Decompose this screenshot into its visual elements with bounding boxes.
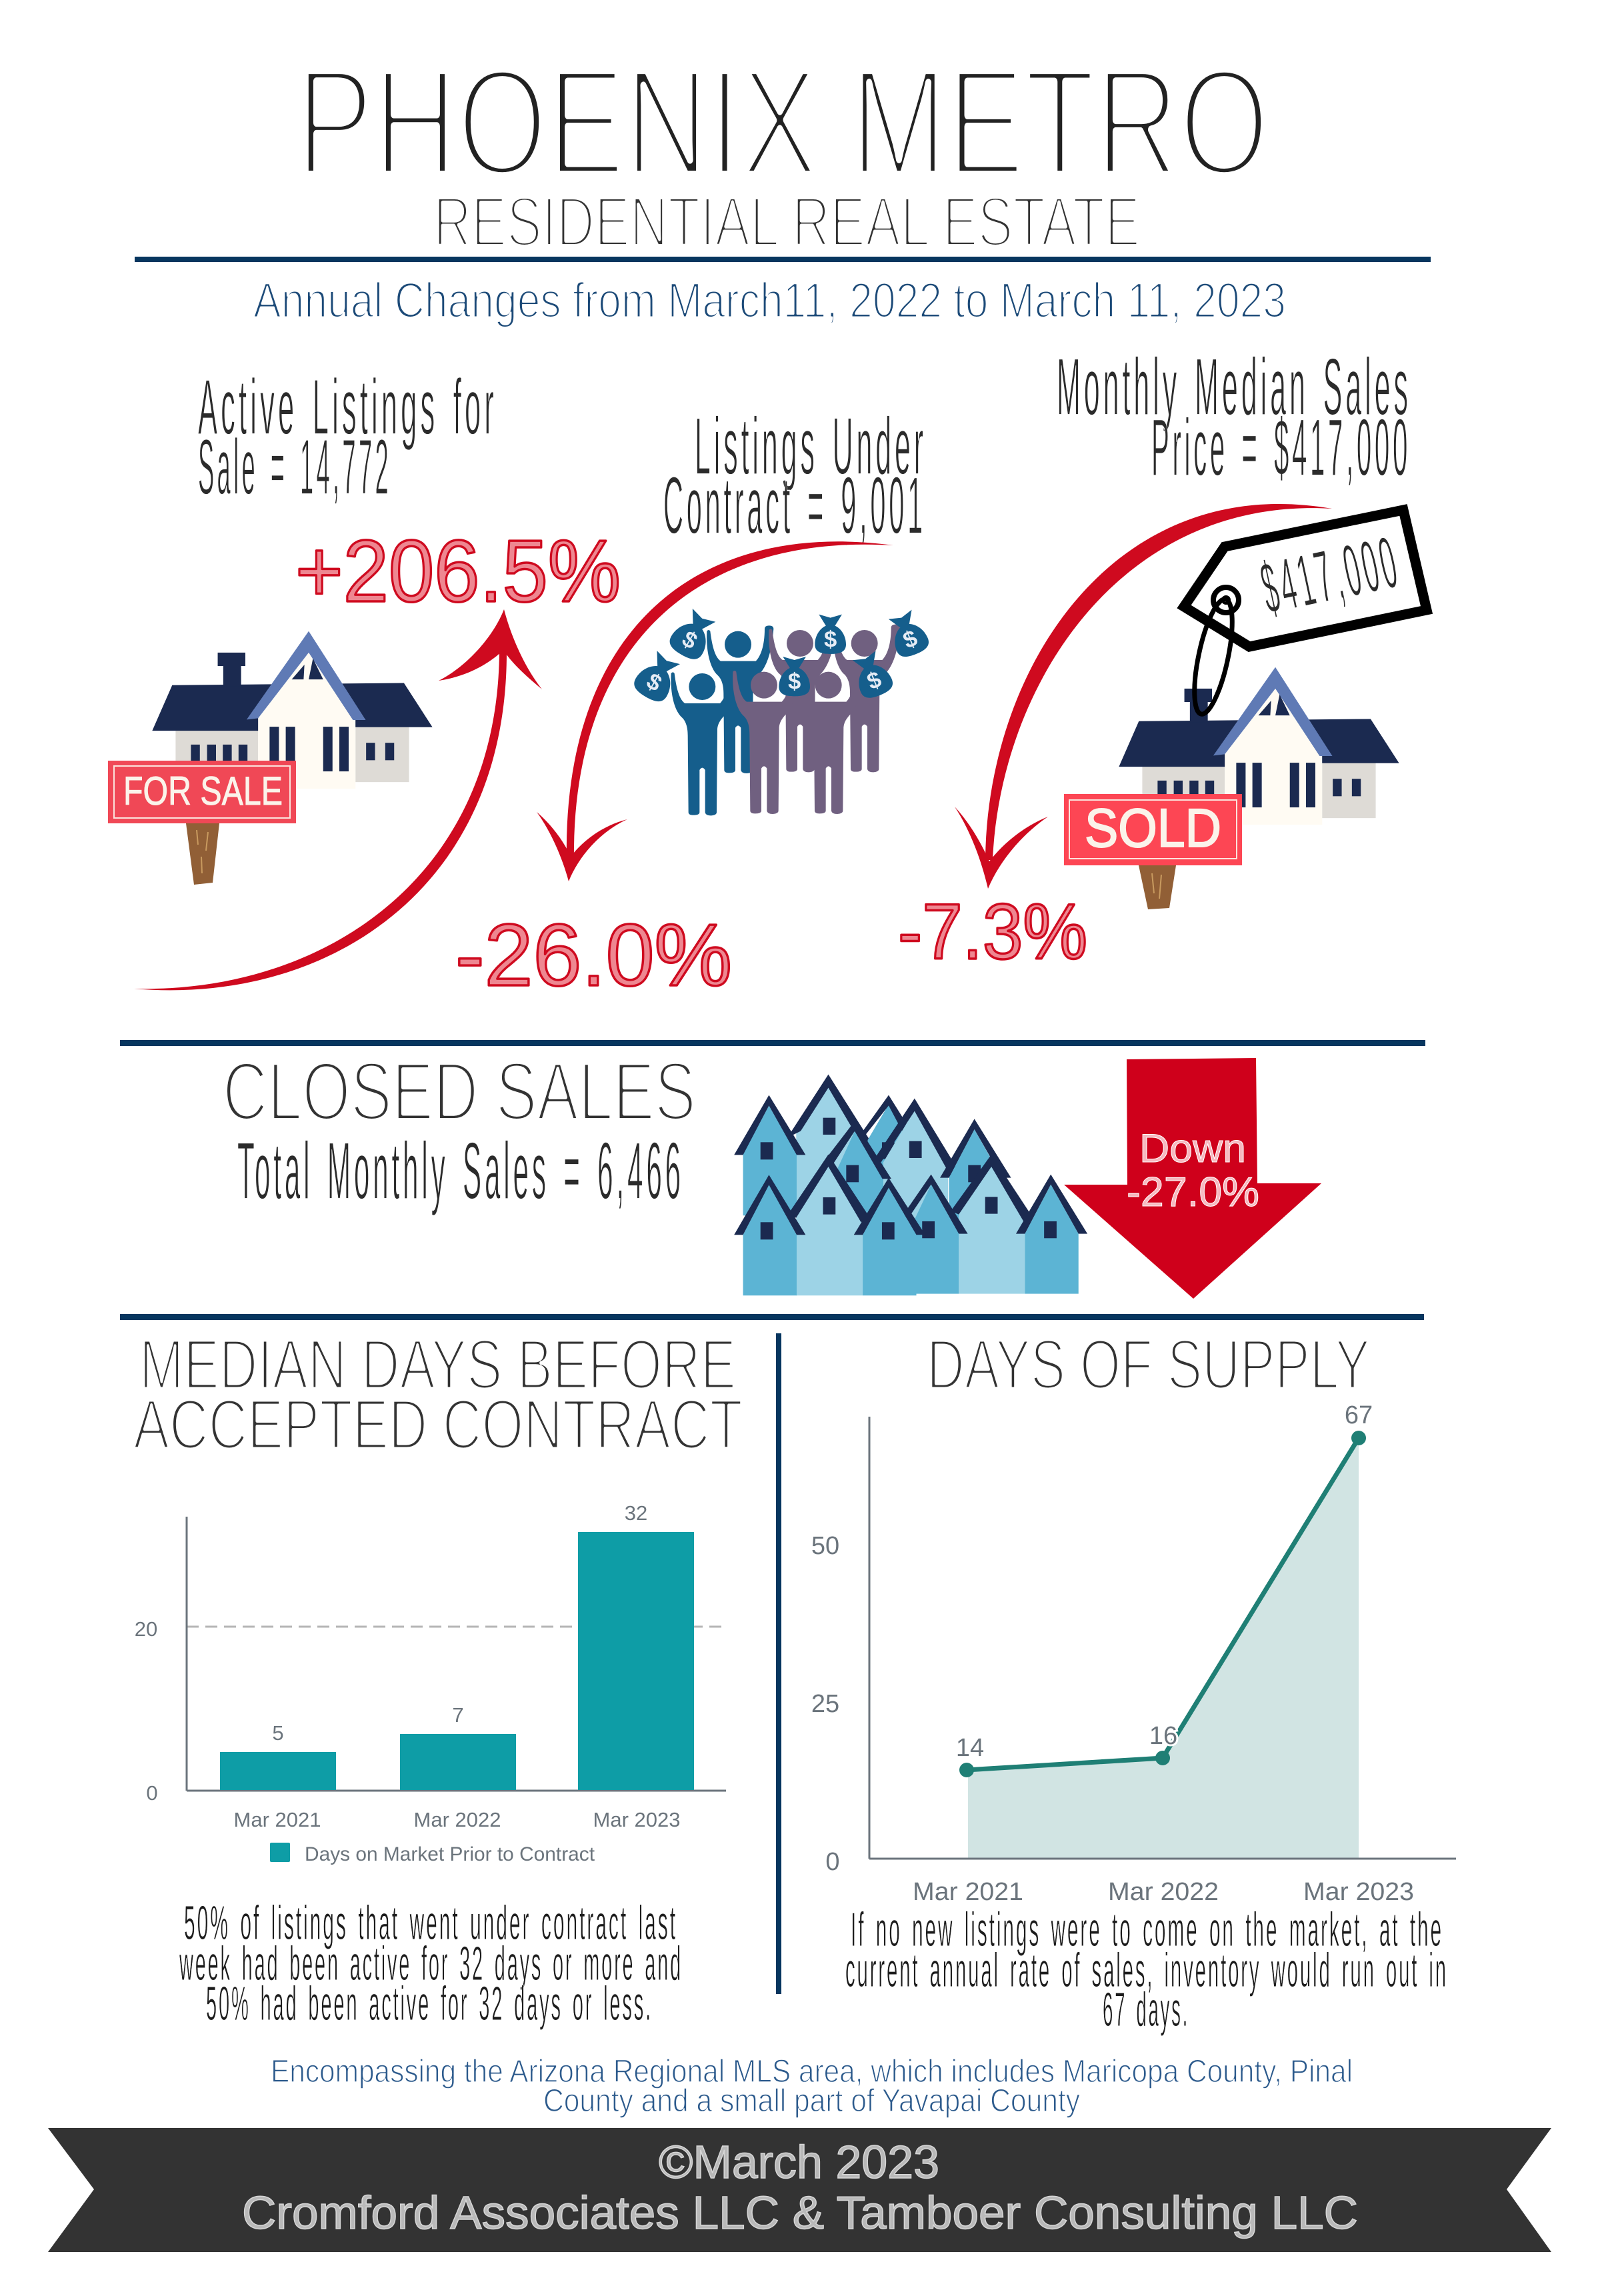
money bags: $: [678, 626, 701, 655]
closed sales heading: CLOSED SALES: [223, 1046, 696, 1138]
area chart: [811, 1401, 1456, 1906]
panel: closed sales: [223, 1046, 1321, 1299]
subtitle: RESIDENTIAL REAL ESTATE: [433, 183, 1140, 261]
area chart: 16: [1149, 1722, 1177, 1750]
bar chart: Mar 2021: [234, 1808, 321, 1831]
money bags: $: [788, 669, 801, 695]
money bags: [630, 606, 932, 706]
title: PHOENIX METRO: [296, 38, 1269, 207]
text: 50% had been active for 32 days or less.: [206, 1977, 653, 2031]
area chart: 50: [811, 1532, 839, 1560]
closed sales change: [1127, 1126, 1259, 1215]
bar chart: 20: [135, 1617, 157, 1641]
icon: for sale sign: FOR SALE: [123, 769, 283, 813]
chart legend: Days on Market Prior to Contract: [305, 1843, 595, 1865]
days of supply note: 67 days.: [1103, 1983, 1189, 2037]
text: Listings Under: [695, 401, 927, 491]
arrow: big down: [1064, 1058, 1321, 1299]
icon: price tag: [1184, 510, 1427, 717]
date range heading: Annual Changes from March11, 2022 to March 11, 2023: [253, 273, 1286, 328]
source note: County and a small part of Yavapai County: [543, 2083, 1080, 2119]
under contract change: -26.0%: [455, 906, 732, 1004]
source note: Encompassing the Arizona Regional MLS area, which includes Maricopa County, Pinal: [271, 2054, 1353, 2089]
money bags: $: [899, 625, 921, 654]
median days heading: [133, 1325, 743, 1464]
panel: active listings: Sale = 14,772: [198, 423, 391, 511]
median days note: [179, 1897, 683, 2031]
text: 50% of listings that went under contract last: [184, 1897, 677, 1950]
icon: sold sign: SOLD: [1085, 798, 1221, 859]
panel: days of supply: [811, 1325, 1456, 2037]
icon: for sale sign: [108, 761, 296, 885]
panel: median sales price: [898, 341, 1427, 976]
arrow: down: [537, 541, 893, 881]
text: week had been active for 32 days or more and: [179, 1937, 683, 1991]
icon: sold sign: [1064, 794, 1242, 909]
under contract label: [663, 401, 927, 551]
bar chart: 32: [625, 1501, 647, 1525]
copyright text: Cromford Associates LLC & Tamboer Consulting LLC: [242, 2187, 1358, 2239]
days of supply heading: DAYS OF SUPPLY: [927, 1325, 1370, 1404]
area chart: 67: [1345, 1401, 1373, 1429]
closed sales change: -27.0%: [1127, 1169, 1259, 1215]
area chart: Mar 2022: [1108, 1878, 1219, 1906]
text: Contract = 9,001: [663, 460, 926, 551]
area chart: Mar 2023: [1303, 1878, 1414, 1906]
panel: closed sales: Total Monthly Sales = 6,466: [237, 1125, 684, 1216]
median price label: [1057, 341, 1411, 493]
panel: median days: [133, 1325, 743, 2031]
active listings change: +206.5%: [295, 522, 621, 620]
copyright text: ©March 2023: [659, 2136, 939, 2188]
area chart: 25: [811, 1690, 839, 1718]
bar chart: Mar 2023: [593, 1808, 680, 1831]
bar chart: 0: [146, 1781, 158, 1805]
icon: crowd holding money bags: [630, 606, 932, 815]
area chart: 0: [825, 1848, 840, 1876]
icon: house for sale: [152, 631, 433, 789]
icon: house sold: [1119, 667, 1399, 825]
bar chart: 5: [272, 1721, 284, 1745]
panel: listings under contract: [455, 401, 932, 1004]
money bags: $: [863, 667, 885, 695]
source note: [271, 2054, 1353, 2119]
active listings label: [198, 363, 497, 511]
icon: cluster of houses: [734, 1075, 1087, 1295]
panel: active listings: [108, 363, 621, 990]
copyright text: [242, 2136, 1358, 2239]
median days heading: ACCEPTED CONTRACT: [133, 1385, 743, 1464]
back row figures: [707, 625, 900, 773]
median price change: -7.3%: [898, 888, 1087, 976]
bar chart: 7: [452, 1703, 464, 1727]
arrow: up: [134, 609, 542, 990]
front row figures: [671, 666, 864, 815]
bar chart: [135, 1501, 726, 1865]
footer banner: [48, 2128, 1551, 2252]
panel: active listings: Active Listings for: [198, 363, 497, 451]
days of supply note: [845, 1903, 1448, 2037]
closed sales change: Down: [1139, 1126, 1246, 1171]
bar chart: Mar 2022: [414, 1808, 501, 1831]
median days heading: MEDIAN DAYS BEFORE: [139, 1325, 736, 1404]
area chart: Mar 2021: [913, 1878, 1023, 1906]
money bags: $: [642, 669, 666, 697]
area chart: 14: [956, 1734, 984, 1762]
arrow: down: [955, 504, 1332, 889]
money bags: $: [824, 627, 837, 652]
